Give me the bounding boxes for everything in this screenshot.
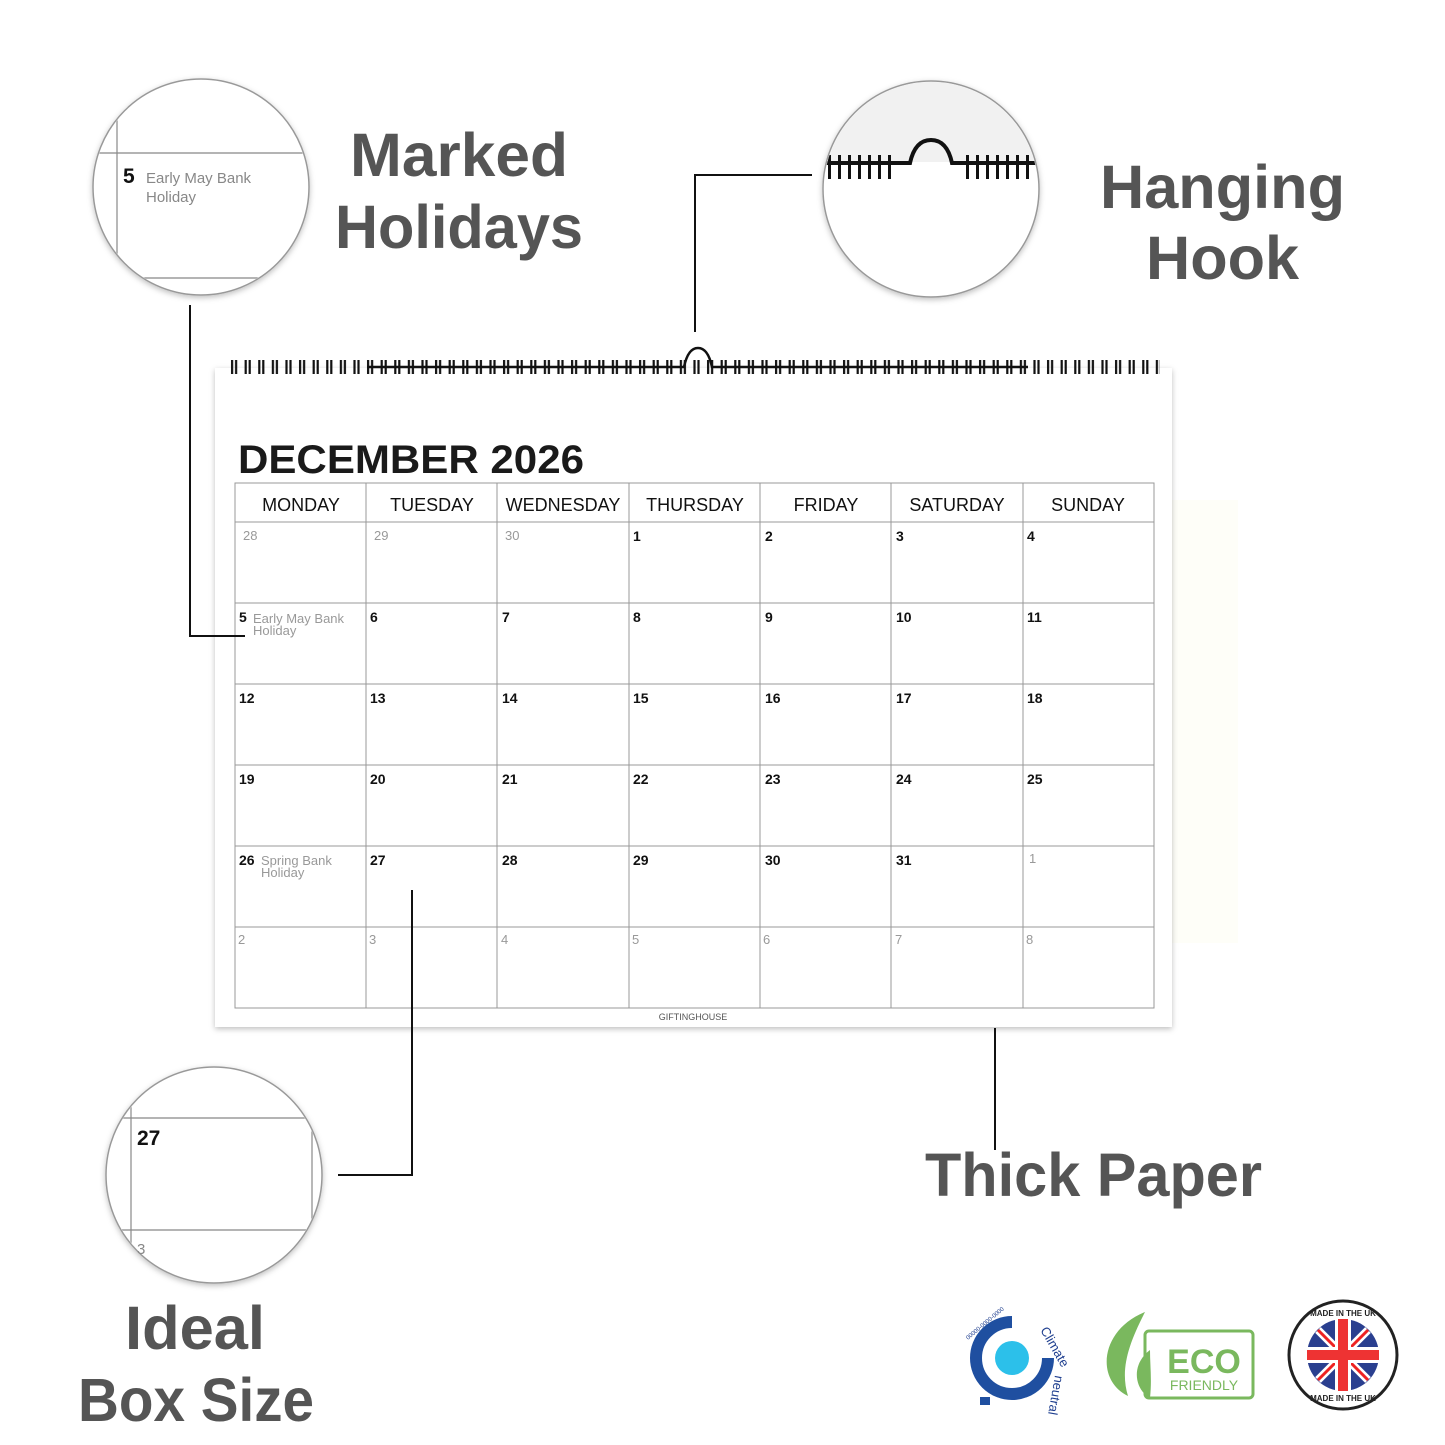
badge: climate neutral: neutral	[1045, 1374, 1067, 1416]
spiral binding	[230, 348, 1160, 374]
day numbers: 14	[502, 690, 518, 706]
circle: box size zoom: 3	[137, 1241, 145, 1258]
day numbers: 27	[370, 852, 386, 868]
label: ideal box size: Ideal	[125, 1294, 265, 1362]
label: marked holidays: Holidays	[335, 193, 583, 261]
day numbers: 6	[370, 609, 378, 625]
label: ideal box size	[78, 1294, 314, 1434]
day numbers: 7	[502, 609, 510, 625]
label: hanging hook: Hook	[1146, 224, 1299, 292]
day numbers: 30	[765, 852, 781, 868]
faint background panel	[1172, 500, 1238, 943]
badge: made in the uk: MADE IN THE UK	[1310, 1309, 1376, 1318]
day numbers: 23	[765, 771, 781, 787]
day numbers: 29	[633, 852, 649, 868]
day numbers: 1	[1029, 851, 1036, 866]
badge: eco friendly: FRIENDLY	[1170, 1377, 1239, 1393]
circle: hanging hook zoom	[820, 80, 1045, 297]
day numbers: 11	[1027, 609, 1042, 625]
day numbers: 30	[505, 528, 519, 543]
day numbers: 9	[765, 609, 773, 625]
day numbers: 10	[896, 609, 912, 625]
day numbers: 19	[239, 771, 255, 787]
circle: marked holidays zoom: Holiday	[146, 189, 197, 206]
day numbers: Early May Bank	[253, 611, 345, 626]
weekday headers: TUESDAY	[390, 495, 474, 515]
weekday headers: SUNDAY	[1051, 495, 1125, 515]
day numbers: 15	[633, 690, 649, 706]
day numbers: Holiday	[261, 865, 305, 880]
day numbers: 8	[633, 609, 641, 625]
calendar title: DECEMBER 2026	[238, 438, 584, 482]
day numbers: 16	[765, 690, 781, 706]
day numbers: 21	[502, 771, 518, 787]
circle: box size zoom	[100, 1065, 330, 1285]
weekday headers: THURSDAY	[646, 495, 744, 515]
day numbers: 26	[239, 852, 255, 868]
badge: climate neutral	[965, 1306, 1072, 1416]
badge: eco friendly	[1107, 1312, 1253, 1398]
badge: climate neutral: Climate	[1037, 1324, 1072, 1370]
day numbers: 2	[765, 528, 773, 544]
day numbers: 28	[502, 852, 518, 868]
weekday headers: SATURDAY	[909, 495, 1005, 515]
day numbers: 22	[633, 771, 649, 787]
day numbers: 28	[243, 528, 257, 543]
label: marked holidays: Marked	[350, 121, 568, 189]
circle: marked holidays zoom	[90, 79, 310, 295]
day numbers: 18	[1027, 690, 1043, 706]
day numbers: 3	[369, 932, 376, 947]
calendar	[215, 348, 1172, 1027]
day numbers: 31	[896, 852, 912, 868]
label: hanging hook	[1100, 153, 1345, 292]
label: hanging hook: Hanging	[1100, 153, 1345, 221]
day numbers: 25	[1027, 771, 1043, 787]
day numbers: 29	[374, 528, 388, 543]
day numbers: 2	[238, 932, 245, 947]
circle: marked holidays zoom: Early May Bank	[146, 170, 252, 187]
connector lines	[190, 175, 995, 1175]
badge: eco friendly: ECO	[1167, 1343, 1241, 1381]
weekday headers: MONDAY	[262, 495, 340, 515]
day numbers: 5	[632, 932, 639, 947]
day numbers: 7	[895, 932, 902, 947]
brand footer: GIFTINGHOUSE	[659, 1012, 727, 1022]
day numbers: 4	[501, 932, 508, 947]
day numbers: 1	[633, 528, 641, 544]
badge: made in the uk	[1289, 1301, 1397, 1409]
circle: box size zoom: 27	[137, 1127, 160, 1150]
day numbers: 4	[1027, 528, 1035, 544]
day numbers: Spring Bank	[261, 853, 332, 868]
weekday headers	[262, 495, 1125, 515]
day numbers: 17	[896, 690, 912, 706]
weekday headers: FRIDAY	[794, 495, 858, 515]
day numbers: 3	[896, 528, 904, 544]
circle: marked holidays zoom: 5	[123, 165, 135, 188]
day numbers: 6	[763, 932, 770, 947]
day numbers: 20	[370, 771, 386, 787]
day numbers: Holiday	[253, 623, 297, 638]
day numbers: 12	[239, 690, 255, 706]
day numbers	[238, 528, 1043, 947]
weekday headers: WEDNESDAY	[506, 495, 620, 515]
badge: made in the uk: MADE IN THE UK	[1310, 1394, 1376, 1403]
day numbers: 8	[1026, 932, 1033, 947]
label: marked holidays	[335, 121, 583, 261]
calendar grid	[235, 483, 1154, 1008]
badge: climate neutral: 00000-0000-0000	[965, 1306, 1006, 1342]
label: ideal box size: Box Size	[78, 1366, 314, 1434]
label: thick paper: Thick Paper	[925, 1141, 1262, 1209]
day numbers: 5	[239, 609, 247, 625]
day numbers: 13	[370, 690, 386, 706]
day numbers: 24	[896, 771, 912, 787]
